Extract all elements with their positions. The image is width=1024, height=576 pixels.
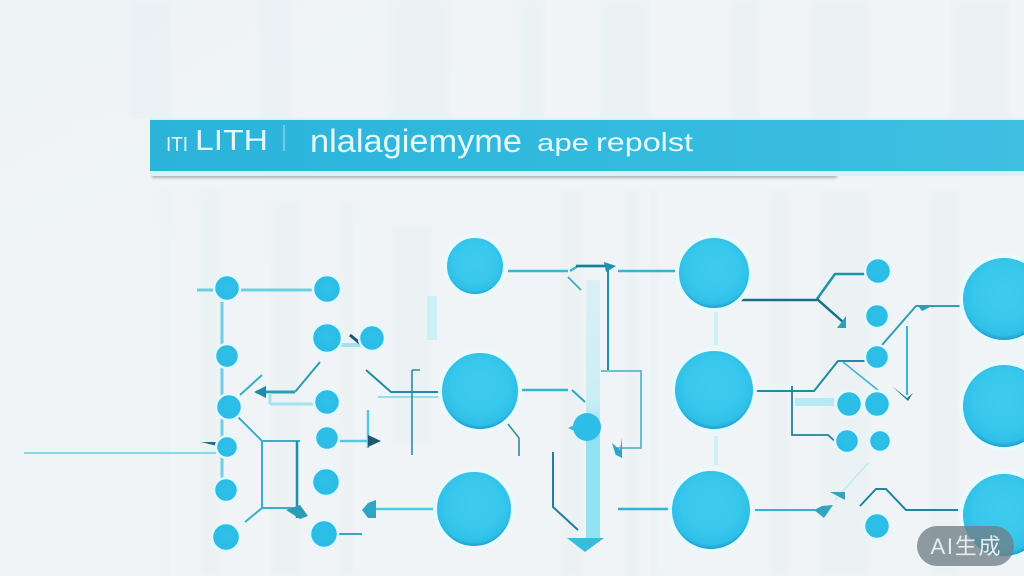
title text: repolst [596, 127, 694, 157]
nodes: second column small circles [310, 275, 385, 548]
nodes: large centre circles [435, 236, 755, 551]
AI badge: AI生成 [930, 534, 1000, 559]
nodes: large right circles [961, 256, 1024, 558]
title text [166, 123, 694, 159]
connector lines: right network [755, 274, 960, 510]
small node: centre drop [573, 413, 601, 441]
title text: ape [537, 130, 589, 157]
title banner [150, 118, 1024, 178]
title text: nlalagiemyme [310, 123, 522, 159]
connector lines: left network [24, 290, 440, 534]
title text: LITH [195, 125, 268, 157]
title text: ITI [166, 134, 188, 156]
arrowheads [201, 262, 932, 552]
nodes: left column small circles [212, 275, 242, 551]
AI badge [917, 526, 1014, 566]
nodes: right cluster small circles [835, 258, 891, 539]
connector lines: centre network [508, 266, 817, 542]
